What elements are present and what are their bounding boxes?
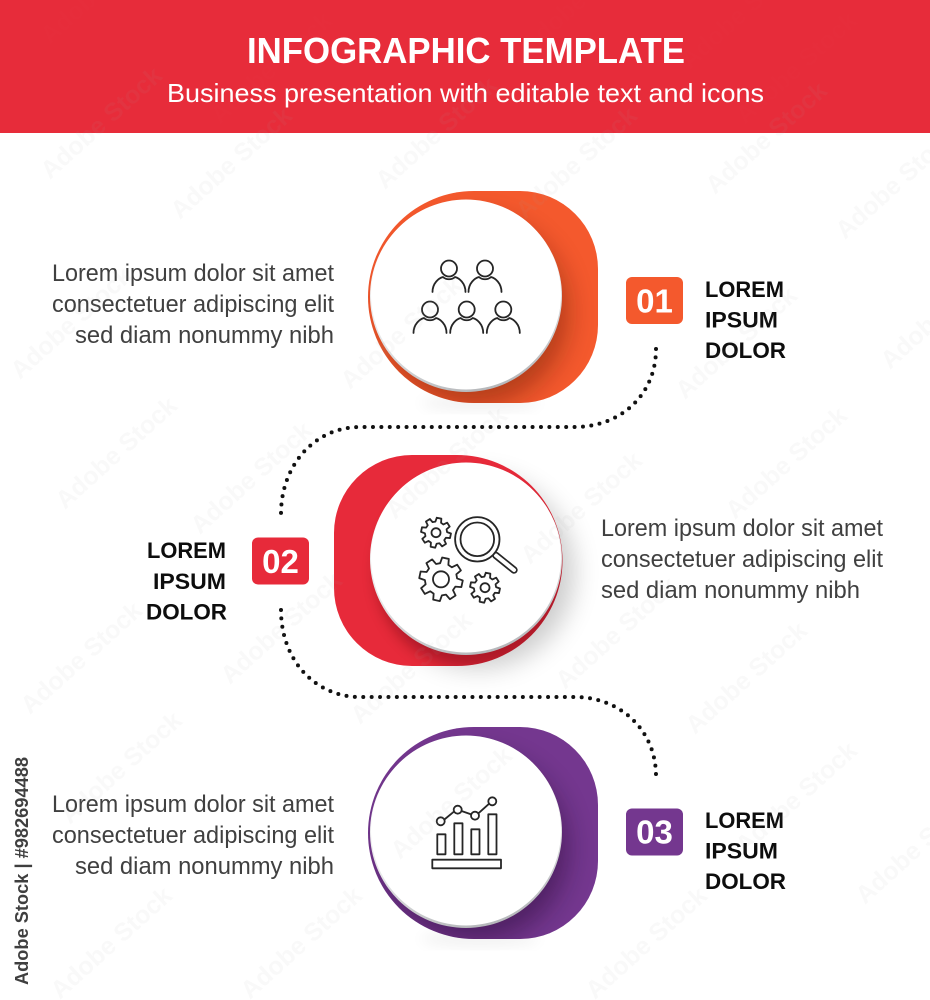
text block: step 2 description: sed diam nonummy nibh — [601, 577, 860, 604]
watermark pattern: Adobe Stock — [55, 706, 188, 829]
text block: step 3 description — [52, 791, 334, 880]
watermark pattern: Adobe Stock — [730, 736, 863, 859]
text block: step 2 description — [601, 515, 883, 604]
heading: step 3: LOREM — [705, 808, 784, 833]
watermark pattern: Adobe Stock — [680, 616, 813, 739]
icon: bar chart with trend line — [432, 797, 501, 868]
white disc — [370, 462, 562, 655]
watermark pattern: Adobe Stock — [185, 416, 318, 539]
heading: step 2 — [146, 538, 227, 624]
badge: 01 — [626, 277, 683, 324]
header banner — [0, 0, 930, 133]
badge: 02 — [252, 538, 309, 584]
dotted connector: step 2 to step 3 — [281, 610, 656, 776]
heading: step 3 — [705, 808, 786, 894]
watermark pattern: Adobe Stock — [700, 76, 833, 199]
text block: step 3 description: consectetuer adipiscing elit — [52, 822, 334, 849]
text block: step 1 description: consectetuer adipiscing elit — [52, 291, 334, 318]
badge: 02: 02 — [262, 543, 299, 580]
watermark pattern: Adobe Stock — [720, 401, 853, 524]
panel: step 3 — [368, 727, 598, 946]
icon: gears and magnifier — [415, 515, 514, 605]
heading: step 1: IPSUM — [705, 308, 778, 332]
watermark pattern: Adobe Stock — [510, 101, 643, 224]
heading: step 1: LOREM — [705, 277, 784, 302]
panel: step 1 — [368, 191, 598, 410]
heading: step 2: IPSUM — [153, 569, 226, 594]
heading: step 2: DOLOR — [146, 600, 227, 624]
watermark pattern: Adobe Stock — [730, 6, 863, 129]
badge: 03: 03 — [636, 814, 673, 850]
watermark pattern: Adobe Stock — [370, 71, 503, 194]
watermark pattern: Adobe Stock — [515, 446, 648, 569]
watermark pattern: Adobe Stock — [385, 741, 518, 864]
stock image credit: Adobe Stock | #982694488 — [11, 757, 32, 985]
watermark pattern: Adobe Stock — [35, 61, 168, 184]
orange backing shape — [368, 191, 598, 403]
watermark pattern: Adobe Stock — [5, 261, 138, 384]
text block: step 3 description: sed diam nonummy nibh — [75, 853, 334, 880]
watermark pattern: Adobe Stock — [215, 566, 348, 689]
watermark pattern: Adobe Stock — [335, 271, 468, 394]
heading: step 1 — [705, 277, 786, 363]
watermark pattern: Adobe Stock — [50, 391, 183, 514]
watermark pattern: Adobe Stock — [345, 606, 478, 729]
icon: people group — [414, 260, 520, 333]
white disc — [370, 736, 562, 928]
dotted connector: step 1 to step 2 — [281, 349, 656, 514]
title: INFOGRAPHIC TEMPLATE — [247, 30, 685, 71]
watermark pattern: Adobe Stock — [550, 571, 683, 694]
red backing shape — [334, 455, 562, 666]
heading: step 3: IPSUM — [705, 838, 778, 864]
text block: step 1 description — [52, 260, 334, 349]
watermark pattern: Adobe Stock — [670, 281, 803, 404]
text block: step 1 description: sed diam nonummy nibh — [75, 322, 334, 349]
purple backing shape — [368, 727, 598, 939]
heading: step 1: DOLOR — [705, 338, 786, 363]
white disc — [370, 200, 562, 392]
watermark pattern: Adobe Stock — [165, 101, 298, 224]
text block: step 2 description: consectetuer adipiscing elit — [601, 546, 883, 573]
text block: step 1 description: Lorem ipsum dolor sit amet — [52, 260, 334, 287]
heading: step 3: DOLOR — [705, 869, 786, 894]
subtitle: Business presentation with editable text and icons — [167, 78, 764, 108]
heading: step 2: LOREM — [147, 538, 226, 563]
badge: 01: 01 — [636, 282, 673, 320]
watermark pattern: Adobe Stock — [15, 596, 148, 719]
panel: step 2 — [334, 455, 574, 668]
watermark pattern: Adobe Stock — [380, 401, 513, 524]
text block: step 3 description: Lorem ipsum dolor sit amet — [52, 791, 334, 818]
badge: 03 — [626, 808, 683, 856]
watermark pattern: Adobe Stock — [205, 6, 338, 129]
text block: step 2 description: Lorem ipsum dolor sit amet — [601, 515, 883, 542]
